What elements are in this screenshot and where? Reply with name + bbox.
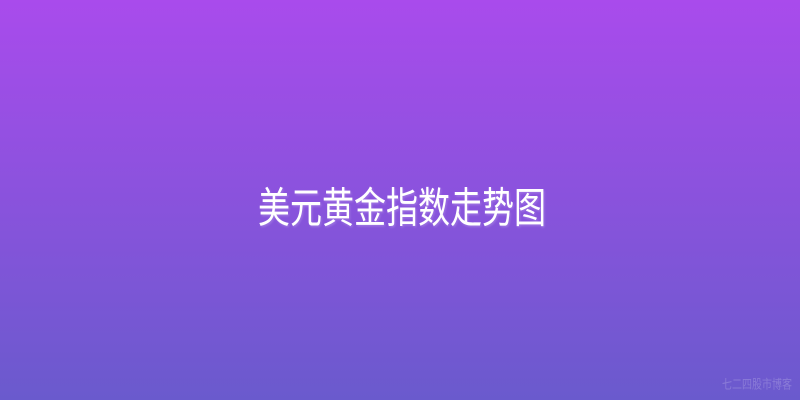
watermark: 七二四股市博客 [722, 378, 792, 392]
title: 美元黄金指数走势图 [258, 184, 546, 232]
